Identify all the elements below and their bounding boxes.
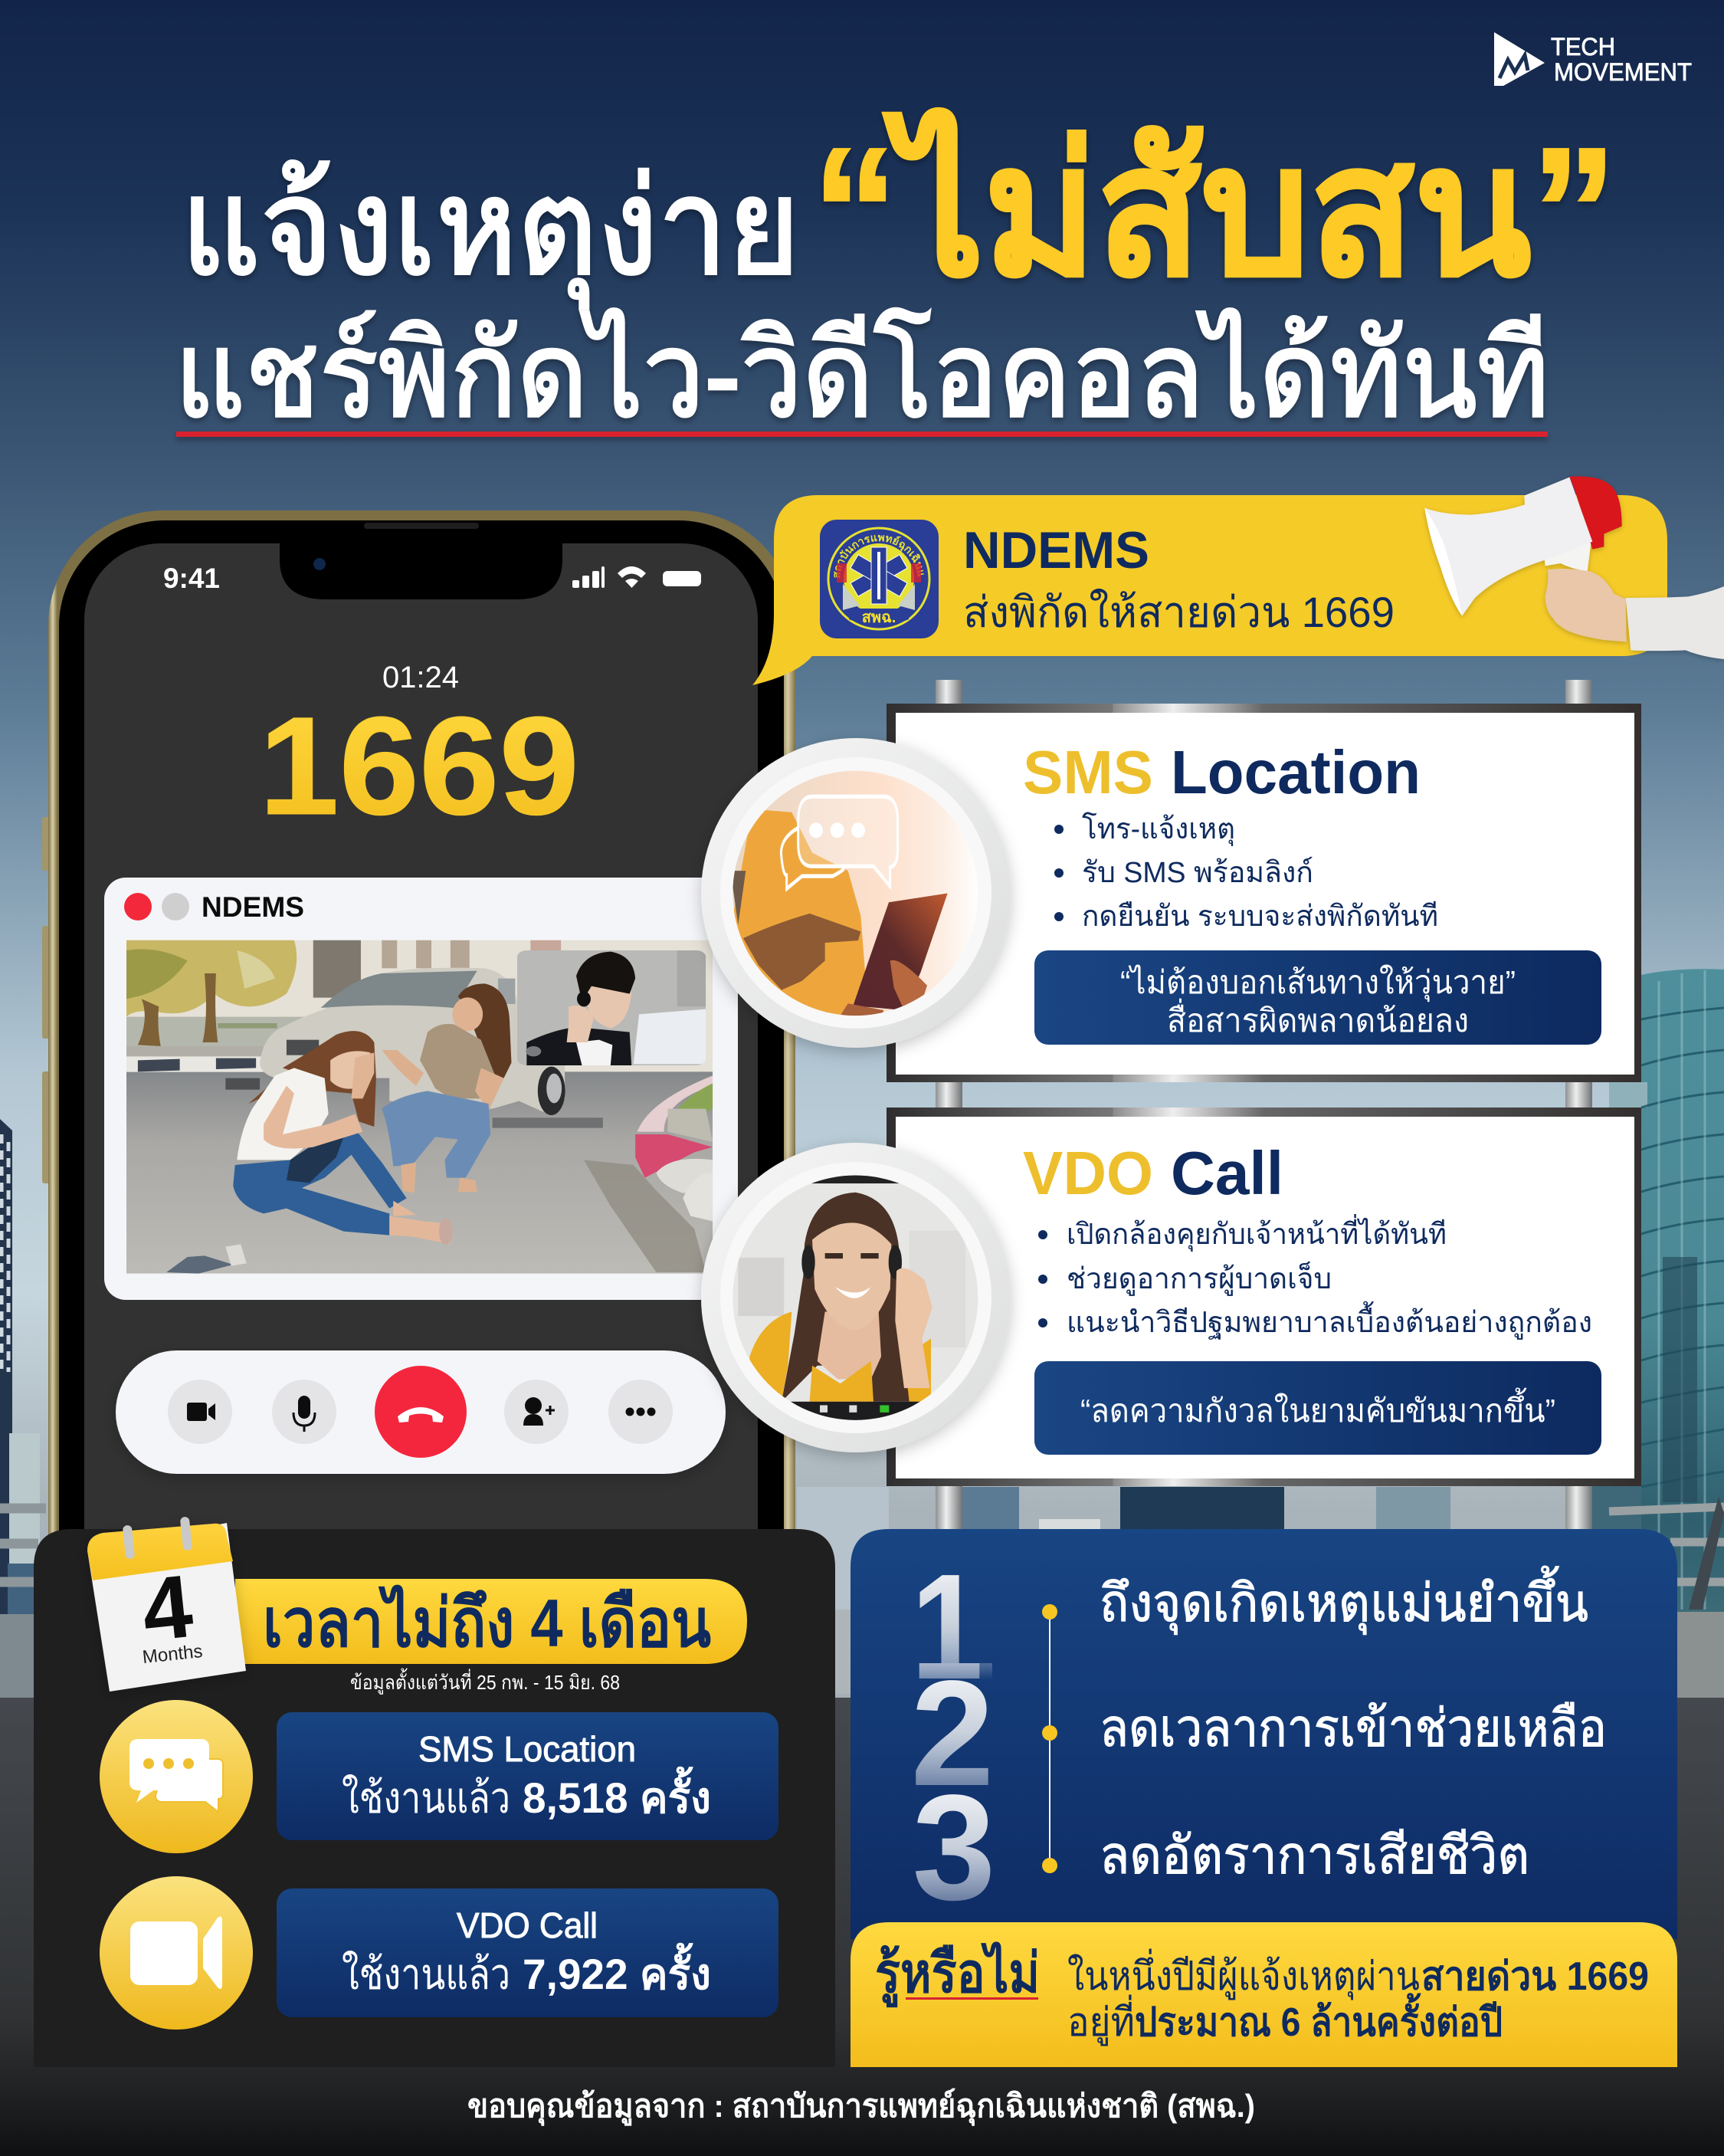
caller name: NDEMS bbox=[202, 891, 304, 923]
stat: SMS Location usage: 8,518 ครั้ง bbox=[523, 1767, 711, 1822]
button: microphone bbox=[272, 1380, 336, 1444]
stat: SMS Location usage: ใช้งานแล้ว bbox=[342, 1774, 510, 1822]
bullet list: SMS steps: โทร-แจ้งเหตุ bbox=[1082, 812, 1235, 846]
title: “ไม่สับสน” bbox=[812, 108, 1617, 313]
heading: VDO Call: VDO bbox=[1023, 1139, 1153, 1207]
did-you-know text: ประมาณ 6 ล้านครั้งต่อปี bbox=[1135, 1993, 1503, 2045]
window dots bbox=[124, 893, 189, 920]
button: more bbox=[608, 1380, 673, 1444]
callout: VDO benefit bbox=[1034, 1361, 1601, 1455]
phone bbox=[42, 510, 795, 1660]
phone status bar: 9:41 bbox=[163, 563, 220, 594]
benefit 2: ลดเวลาการเข้าช่วยเหลือ bbox=[1100, 1699, 1607, 1757]
bullet list: VDO benefits bbox=[1038, 1214, 1592, 1340]
circle photo: call-centre woman bbox=[701, 1143, 1011, 1452]
heading: SMS Location: SMS bbox=[1023, 738, 1153, 806]
numerals 1 2 3: 2 bbox=[910, 1649, 995, 1817]
phone status bar bbox=[163, 563, 701, 594]
callout: SMS benefit: “ไม่ต้องบอกเส้นทางให้วุ่นวาย” bbox=[1120, 964, 1516, 1003]
footer credit: ขอบคุณข้อมูลจาก : สถาบันการแพทย์ฉุกเฉินแห่งชาติ (สพฉ.) bbox=[467, 2088, 1255, 2126]
circle photo: hand with phone bbox=[701, 738, 1011, 1048]
timeline bbox=[1042, 1604, 1057, 1873]
data period note: ข้อมูลตั้งแต่วันที่ 25 กพ. - 15 มิย. 68 bbox=[350, 1668, 620, 1695]
bullet list: VDO benefits: ช่วยดูอาการผู้บาดเจ็บ bbox=[1067, 1261, 1332, 1296]
stat: SMS Location usage: SMS Location bbox=[418, 1729, 636, 1769]
panel: 4-month statistics bbox=[34, 1516, 835, 2067]
callout: SMS benefit: สื่อสารผิดพลาดน้อยลง bbox=[1167, 999, 1469, 1039]
heading: SMS Location: Location bbox=[1171, 738, 1421, 806]
button: add person bbox=[504, 1380, 569, 1444]
icon: NDEMS emblem: สพฉ. bbox=[862, 609, 896, 626]
callout: SMS benefit bbox=[1034, 950, 1601, 1045]
number 1669: 1669 bbox=[259, 687, 579, 844]
did-you-know text: สายด่วน 1669 bbox=[1421, 1954, 1649, 1999]
did-you-know text: ในหนึ่งปีมีผู้แจ้งเหตุผ่าน bbox=[1067, 1948, 1420, 2000]
stat: VDO Call usage bbox=[277, 1889, 778, 2017]
heading: VDO Call: Call bbox=[1171, 1139, 1283, 1207]
icon: calendar: Months bbox=[142, 1641, 204, 1668]
numerals 1 2 3 bbox=[910, 1543, 996, 1931]
numerals 1 2 3: 1 bbox=[911, 1543, 983, 1711]
did-you-know text bbox=[1067, 1948, 1649, 2046]
panel: VDO Call sign bbox=[887, 1108, 1641, 1486]
bullet list: SMS steps bbox=[1054, 812, 1438, 933]
bullet list: SMS steps: รับ SMS พร้อมลิงก์ bbox=[1082, 856, 1313, 889]
did-you-know text: อยู่ที่ bbox=[1067, 1994, 1135, 2046]
stat: SMS Location usage bbox=[277, 1712, 778, 1840]
stat: VDO Call usage: VDO Call bbox=[457, 1905, 598, 1945]
logo: Tech Movement bbox=[1494, 32, 1692, 86]
did-you-know heading: รู้หรือไม่ bbox=[875, 1941, 1040, 2008]
button: hang up bbox=[375, 1366, 467, 1458]
title: แชร์พิกัดไว-วิดีโอคอลได้ทันที bbox=[175, 308, 1549, 442]
benefit 1: ถึงจุดเกิดเหตุแม่นยำขึ้น bbox=[1100, 1566, 1588, 1635]
bullet list: VDO benefits: เปิดกล้องคุยกับเจ้าหน้าที่ได้ทันที bbox=[1067, 1214, 1447, 1252]
bullet list: VDO benefits: แนะนำวิธีปฐมพยาบาลเบื้องต้นอย่างถูกต้อง bbox=[1067, 1301, 1592, 1340]
icon: NDEMS emblem: สถาบันการแพทย์ฉุกเฉินแห่งชาติ bbox=[834, 535, 924, 578]
panel: did you know bbox=[851, 1922, 1677, 2067]
heading: SMS Location bbox=[1023, 738, 1421, 806]
logo: Tech Movement: MOVEMENT bbox=[1554, 58, 1692, 86]
video call card bbox=[104, 878, 738, 1300]
benefit 3: ลดอัตราการเสียชีวิต bbox=[1100, 1826, 1529, 1885]
call control bar bbox=[116, 1350, 726, 1474]
yellow heading pill: เวลาไม่ถึง 4 เดือน bbox=[263, 1585, 711, 1661]
speech bubble: NDEMS bbox=[752, 495, 1667, 685]
bubble subheading: ส่งพิกัดให้สายด่วน 1669 bbox=[963, 588, 1395, 636]
numerals 1 2 3: 3 bbox=[912, 1764, 996, 1931]
heading: VDO Call bbox=[1023, 1139, 1283, 1207]
icon: calendar: 4 bbox=[137, 1556, 197, 1660]
panel: three benefits bbox=[851, 1529, 1677, 1939]
icon: chat bubbles bbox=[100, 1700, 253, 1853]
bullet list: SMS steps: กดยืนยัน ระบบจะส่งพิกัดทันที bbox=[1082, 901, 1438, 933]
callout: VDO benefit: “ลดความกังวลในยามคับขันมากขึ้น” bbox=[1080, 1387, 1555, 1429]
panel: SMS Location sign bbox=[887, 704, 1641, 1082]
stat: VDO Call usage: ใช้งานแล้ว bbox=[342, 1950, 510, 1998]
title bbox=[175, 108, 1617, 442]
phone notch bbox=[280, 523, 562, 599]
icon: hand with megaphone bbox=[1424, 476, 1724, 659]
photo: roadside accident and video operator bbox=[126, 940, 713, 1274]
title: แจ้งเหตุง่าย bbox=[181, 153, 800, 309]
logo: Tech Movement: TECH bbox=[1551, 33, 1615, 61]
sign posts bbox=[936, 680, 1592, 1531]
icon: NDEMS emblem bbox=[820, 520, 939, 638]
button: camera bbox=[168, 1380, 232, 1444]
stat: VDO Call usage: 7,922 ครั้ง bbox=[523, 1943, 711, 1998]
bubble heading: NDEMS bbox=[963, 521, 1149, 579]
icon: video camera bbox=[100, 1876, 253, 2030]
call timer: 01:24 bbox=[382, 661, 459, 694]
icon: calendar bbox=[87, 1516, 246, 1692]
